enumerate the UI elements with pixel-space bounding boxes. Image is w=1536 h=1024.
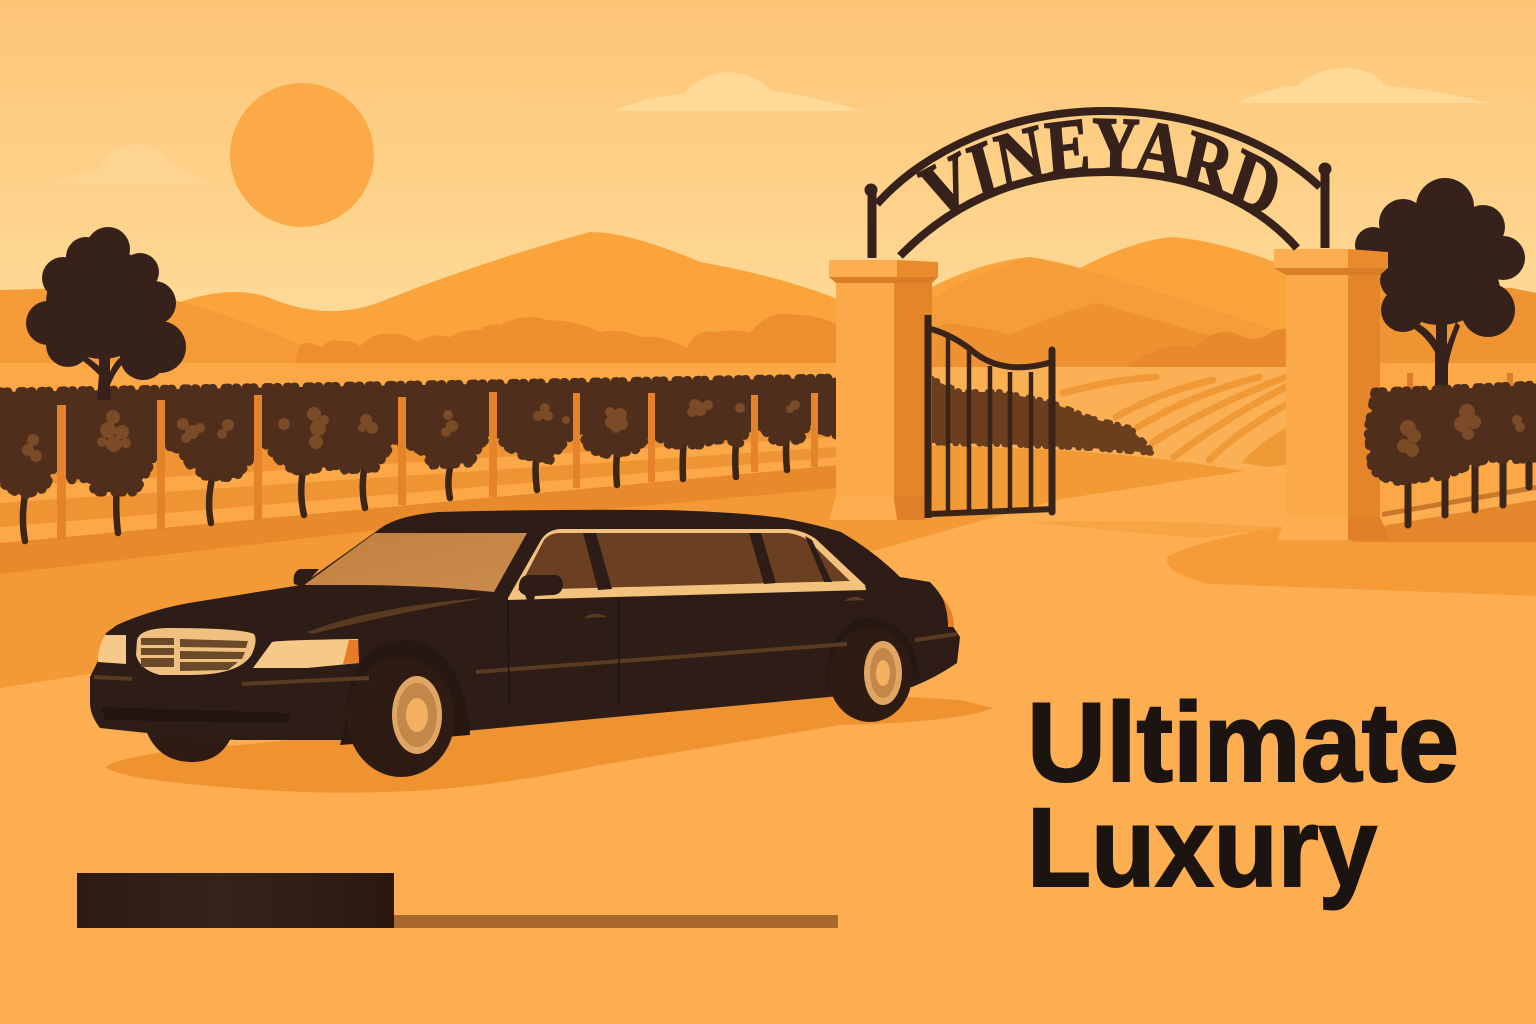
heading: Ultimate: [1027, 680, 1459, 805]
road: [0, 464, 1536, 1024]
vine trunks right: [1408, 450, 1529, 525]
distant hills: [0, 232, 1536, 380]
tree line left: [295, 313, 840, 363]
front wheel: [340, 640, 470, 777]
far front wheel: [147, 733, 233, 762]
headlight: right: [253, 639, 359, 668]
vine row behind gate: [930, 378, 1154, 453]
gate pillar: right: [1274, 249, 1390, 540]
heading: Luxury: [1027, 785, 1377, 910]
mound behind gate: [925, 445, 1250, 520]
vine canopy right: [1368, 385, 1536, 482]
cloud: centre: [612, 72, 862, 111]
open iron gate: [928, 315, 1055, 518]
limousine: [90, 510, 993, 793]
road shading strip: [1030, 521, 1280, 538]
vine trunks left: [23, 435, 787, 541]
sign text: VINEYARD: [916, 118, 1278, 211]
field with furrows: [925, 367, 1290, 520]
vine canopy left: [0, 378, 836, 496]
verge right: [1167, 526, 1536, 596]
grille: [136, 628, 256, 675]
car body: [90, 510, 960, 740]
vine posts left: [57, 392, 818, 540]
side window trim: [508, 529, 866, 600]
vineyard ground: [0, 363, 840, 603]
progress bar: [77, 873, 838, 928]
ground layers: [0, 400, 1060, 720]
tree: right: [1355, 178, 1525, 393]
rear wheel: [826, 618, 920, 722]
gate pillar: left: [829, 260, 938, 520]
grape clusters left: [22, 399, 800, 462]
door mirror: [519, 575, 563, 600]
grape clusters right: [1397, 404, 1525, 457]
left wing mirror: [294, 569, 319, 587]
ground right of pillar: [1350, 373, 1536, 542]
trim and details: [94, 597, 957, 723]
tree: left: [26, 227, 186, 400]
windshield: [304, 533, 527, 592]
cloud: right: [1236, 68, 1488, 103]
headlight: left: [98, 635, 126, 664]
car shadow: [105, 690, 993, 793]
heading: [1027, 680, 1459, 910]
window pillars: [583, 533, 832, 590]
side windows: [518, 533, 850, 590]
cloud: left: [52, 144, 212, 184]
sun: [230, 83, 374, 227]
sky: [0, 0, 1536, 400]
tree line right of gate: [1128, 328, 1290, 367]
vineyard arch sign: [864, 107, 1332, 259]
